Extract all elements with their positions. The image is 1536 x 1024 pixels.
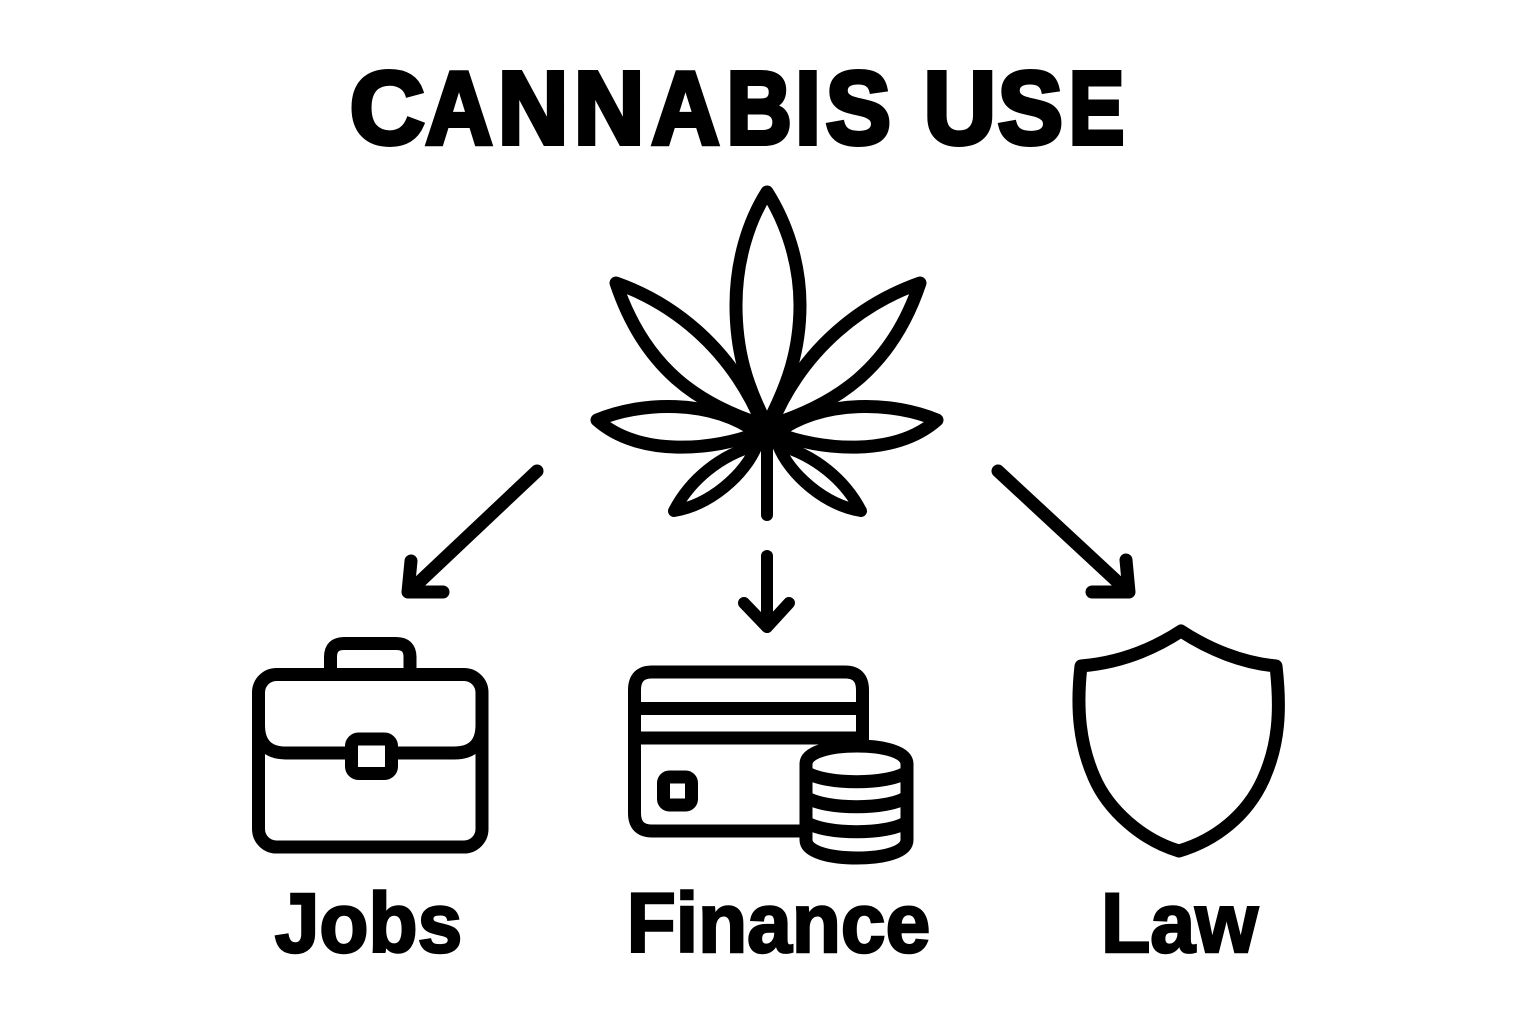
title: N xyxy=(498,50,568,166)
title: E xyxy=(1069,50,1124,166)
title: U xyxy=(924,50,996,166)
icon: shield xyxy=(1079,631,1278,851)
title: C xyxy=(350,50,425,166)
title: N xyxy=(574,50,644,166)
label: jobs: Jobs xyxy=(275,876,462,970)
title: A xyxy=(426,50,492,166)
title: A xyxy=(652,50,720,166)
icon: briefcase xyxy=(258,644,482,847)
title: I xyxy=(795,50,821,166)
title: S xyxy=(998,50,1063,166)
icon: cannabis leaf xyxy=(597,192,937,515)
title: S xyxy=(826,50,891,166)
label: finance: Finance xyxy=(627,876,930,970)
label: law: Law xyxy=(1101,876,1259,970)
arrow: to jobs xyxy=(408,471,537,592)
icon: card and coins xyxy=(634,672,907,858)
arrow: to law xyxy=(998,471,1129,592)
title: B xyxy=(726,50,792,166)
arrow: to finance xyxy=(744,556,789,627)
